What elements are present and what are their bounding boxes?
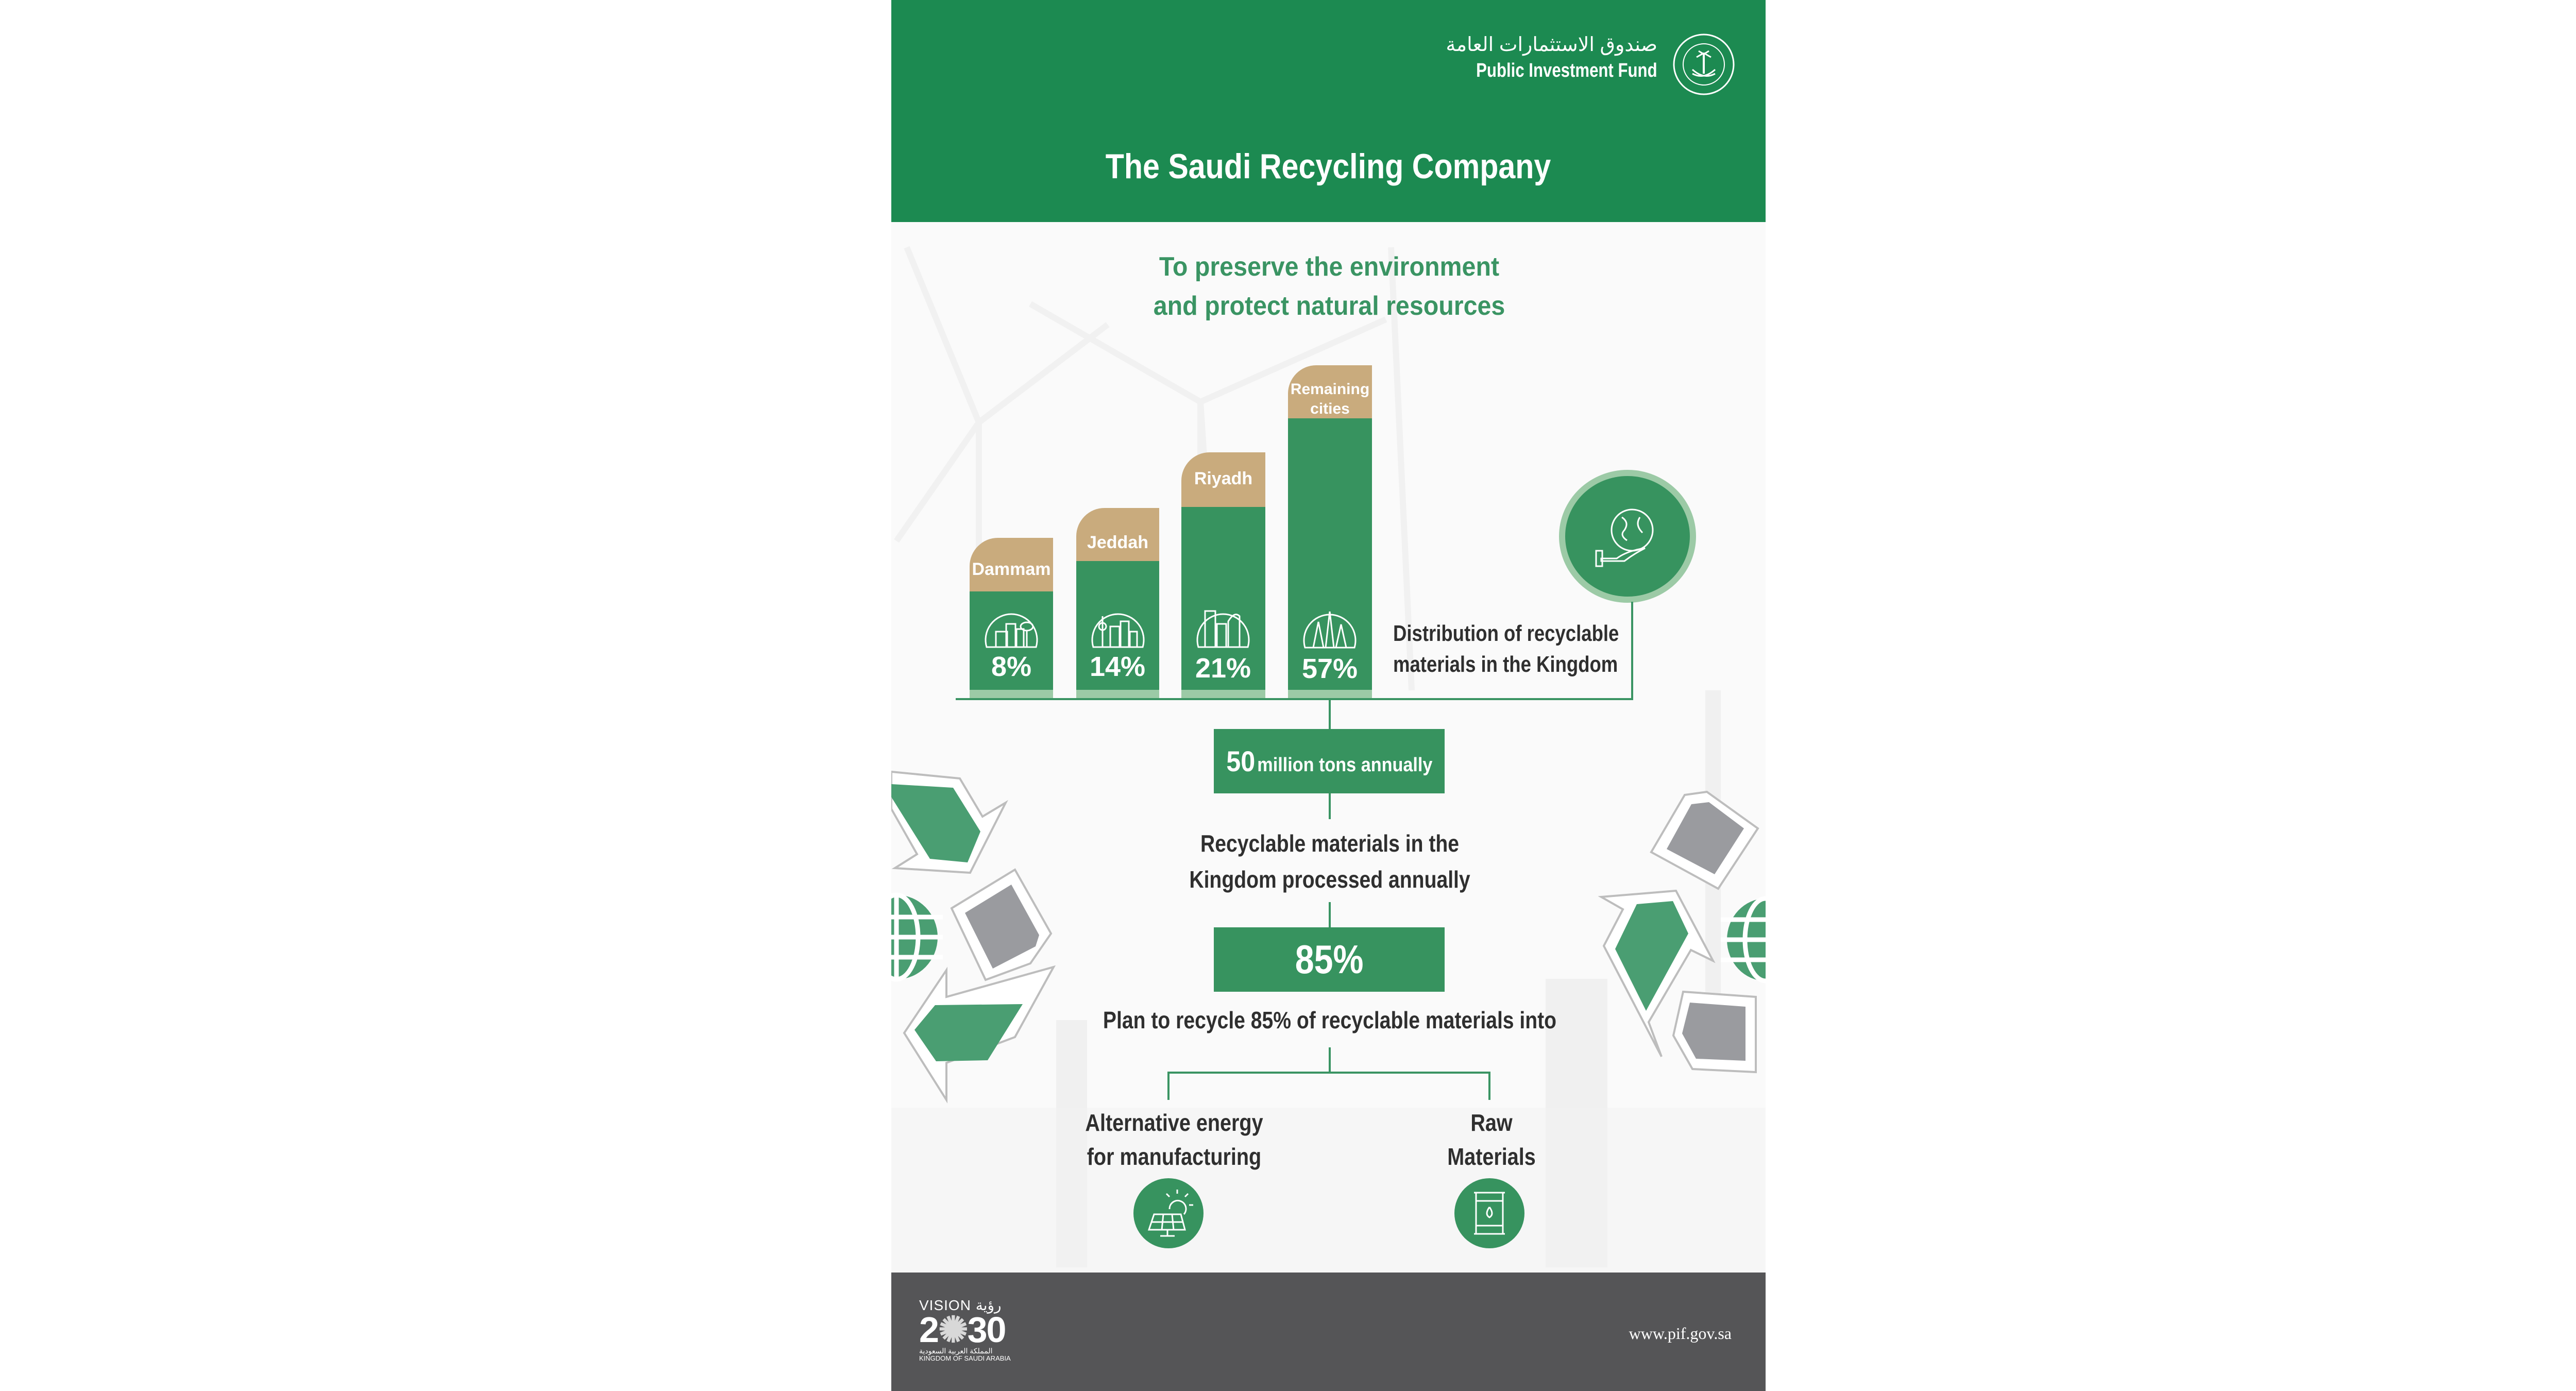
title: The Saudi Recycling Company: [1106, 147, 1551, 186]
bar: Remaining cities: [1288, 365, 1372, 698]
text: recyclable materials processed: Recyclable materials in the: [1200, 830, 1459, 857]
box: 50 million tons annually: 50 million tons annually: [1226, 745, 1432, 777]
text: raw materials: [1447, 1109, 1536, 1170]
text: distribution caption: materials in the Kingdom: [1393, 652, 1618, 677]
text: recyclable materials processed: [1189, 830, 1470, 893]
bar: Remaining cities: cities: [1310, 400, 1350, 417]
text: recyclable materials processed: Kingdom processed annually: [1189, 866, 1470, 893]
url: www.pif.gov.sa: [1629, 1324, 1732, 1343]
background panel: [891, 0, 1766, 1391]
PIF logo text: Public Investment Fund: [1477, 60, 1657, 81]
logo: Vision 2030: KINGDOM OF SAUDI ARABIA: [919, 1354, 1011, 1362]
icon: oil barrel: [1454, 1178, 1524, 1248]
PIF logo text: [1446, 34, 1657, 81]
logo: Vision 2030: 2✺30: [919, 1310, 1005, 1350]
icon: solar panel: [1133, 1178, 1204, 1248]
bar chart: distribution by city: [956, 365, 1633, 700]
logo: Vision 2030: VISION رؤية: [919, 1297, 1002, 1313]
subtitle: [1154, 252, 1505, 321]
bar: Remaining cities: Remaining: [1291, 381, 1369, 398]
bar: Remaining cities: 57%: [1302, 653, 1358, 684]
bar: Dammam: [970, 538, 1053, 698]
icon: left recycle symbol: [891, 771, 1056, 1104]
bar: Riyadh: [1181, 452, 1265, 698]
bar: Dammam: Dammam: [972, 559, 1051, 579]
box: 50 million tons annually: [1214, 729, 1445, 793]
bar: Dammam: 8%: [991, 651, 1031, 682]
text: distribution caption: Distribution of recyclable: [1393, 621, 1619, 646]
text: raw materials: Materials: [1447, 1143, 1536, 1170]
logo: Vision 2030: [919, 1297, 1011, 1362]
subtitle: To preserve the environment: [1159, 252, 1499, 282]
logo: Vision 2030: المملكة العربية السعودية: [919, 1347, 993, 1355]
icon: globe in hand circle: [1559, 470, 1696, 603]
baseline: [956, 698, 1633, 700]
text: alternative energy: Alternative energy: [1085, 1109, 1263, 1136]
text: plan to recycle: Plan to recycle 85% of recyclable materials into: [1103, 1007, 1556, 1033]
box: 85%: 85%: [1295, 937, 1363, 982]
header band: [891, 0, 1766, 222]
bar: Jeddah: Jeddah: [1087, 533, 1148, 552]
icon: right recycle symbol: [1598, 790, 1766, 1074]
text: raw materials: Raw: [1470, 1109, 1513, 1136]
subtitle: and protect natural resources: [1154, 291, 1505, 321]
bar: Jeddah: [1076, 508, 1159, 698]
text: alternative energy: [1085, 1109, 1263, 1170]
box: 85%: [1214, 927, 1445, 992]
text: distribution caption: [1393, 621, 1619, 677]
bar: Jeddah: 14%: [1090, 651, 1145, 682]
PIF logo text: صندوق الاستثمارات العامة: [1446, 34, 1657, 56]
bar: Riyadh: 21%: [1195, 653, 1251, 684]
icon: PIF emblem: [1673, 34, 1734, 95]
footer: [891, 1273, 1766, 1391]
text: alternative energy: for manufacturing: [1087, 1143, 1261, 1170]
bar: Riyadh: Riyadh: [1194, 469, 1252, 488]
